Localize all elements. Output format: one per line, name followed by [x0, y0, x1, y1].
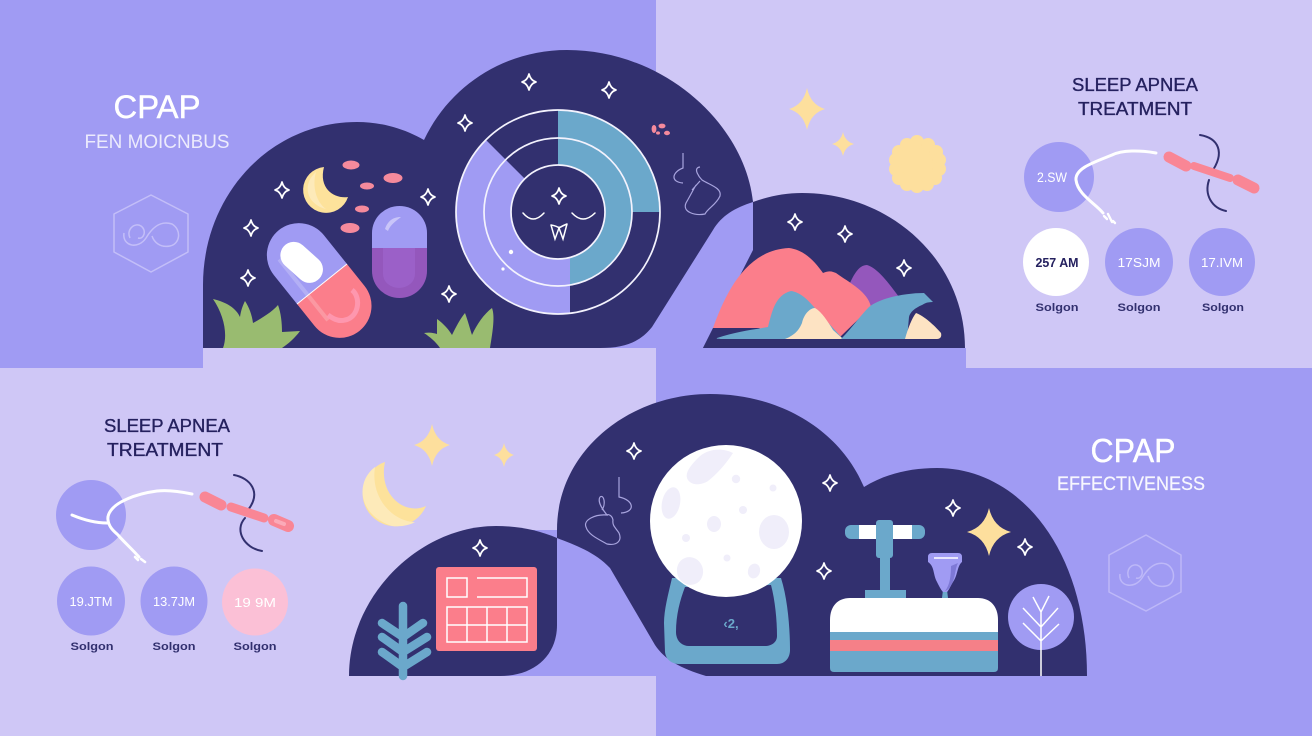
heading: CPAP top left — [84, 89, 230, 153]
stars: bottom right — [627, 443, 1032, 579]
icon: airway doodle — [674, 153, 720, 215]
icon: grass right — [424, 308, 493, 348]
icon: gold stars bottom — [414, 424, 514, 467]
blob: top left — [203, 50, 753, 348]
heading: CPAP effectiveness: CPAP — [1090, 432, 1176, 469]
icon: white tree in circle — [1008, 584, 1074, 676]
stat: 257 AM — [1023, 228, 1089, 314]
stat: 19 9M pink: Solgon — [234, 641, 277, 653]
heading: sleep apnea treatment: SLEEP APNEA — [104, 416, 230, 436]
stars: top left — [241, 74, 616, 302]
stat: 17.IVM — [1189, 228, 1255, 314]
stat: 17SJM: 17SJM — [1118, 255, 1160, 270]
icon: calendar — [436, 567, 537, 651]
icon: teal stand — [664, 578, 790, 664]
stat: 19.JTM — [57, 566, 125, 653]
stat: 13.7JM — [140, 566, 208, 653]
star: bottom left — [473, 540, 487, 556]
icon: airway doodle — [586, 477, 631, 544]
panel: bottom scene right — [557, 394, 1087, 676]
icon: full moon — [650, 445, 802, 597]
heading: sleep apnea treatment — [104, 416, 230, 460]
icon: upright capsule — [372, 206, 427, 298]
stat: 17.IVM: 17.IVM — [1201, 255, 1243, 270]
circle: device — [56, 480, 126, 550]
stat: 257 AM: Solgon — [1036, 302, 1079, 314]
icon: crescent moon cream — [363, 462, 426, 526]
icon: teal stand: ‹2, — [723, 616, 739, 631]
icon: gold stars top — [789, 88, 854, 156]
icon: CPAP machine — [830, 520, 998, 672]
circle: device reading: 2.SW — [1037, 169, 1068, 185]
chart: sleep donut — [456, 110, 660, 314]
icon: crescent moon — [303, 167, 348, 213]
stat: 19.JTM: 19.JTM — [70, 594, 112, 609]
stat: 17.IVM: Solgon — [1202, 302, 1244, 314]
icon: sleeping face — [523, 188, 595, 239]
icon: mountains and waves — [703, 248, 941, 348]
stat: 13.7JM: 13.7JM — [153, 594, 195, 609]
stat: 17SJM: Solgon — [1118, 302, 1161, 314]
heading: CPAP top left: FEN MOICNBUS — [84, 132, 230, 153]
heading: CPAP effectiveness: EFFECTIVENESS — [1057, 474, 1205, 495]
panel: top right landscape — [703, 193, 965, 348]
stat: 19 9M pink: 19 9M — [234, 595, 276, 610]
panel: bottom scene left — [349, 526, 557, 676]
icon: grass left — [213, 299, 300, 348]
stat: 257 AM: 257 AM — [1036, 255, 1078, 270]
heading: sleep apnea treatment: SLEEP APNEA — [1072, 75, 1198, 95]
icon: coral specks — [652, 124, 670, 135]
blob: bottom left — [349, 526, 557, 676]
stars: landscape — [788, 214, 911, 276]
stat: 17SJM — [1105, 228, 1173, 314]
blob: bottom right — [557, 394, 1087, 676]
panel: sleep apnea treatment top right — [1023, 75, 1255, 314]
icon: scalloped sun — [889, 135, 946, 193]
heading: sleep apnea treatment — [1072, 75, 1198, 119]
blob: top right — [703, 193, 965, 348]
heading: CPAP top left: CPAP — [114, 89, 200, 125]
icon: teal tree — [382, 606, 427, 676]
icon: hexagon swirl top left — [114, 195, 188, 272]
heading: sleep apnea treatment: TREATMENT — [1078, 99, 1192, 119]
stat: 19 9M pink — [222, 568, 288, 653]
panel: sleep apnea treatment bottom left — [56, 416, 288, 653]
heading: sleep apnea treatment: TREATMENT — [107, 440, 223, 460]
panel: top left night scene — [203, 50, 753, 351]
icon: tilted capsule — [254, 210, 384, 351]
heading: CPAP effectiveness — [1057, 432, 1205, 495]
stat: 19.JTM: Solgon — [70, 641, 114, 653]
stat: 13.7JM: Solgon — [152, 641, 196, 653]
icon: hexagon swirl bottom right — [1109, 535, 1181, 611]
icon: CPAP tube — [1076, 135, 1254, 223]
icon: gold star — [967, 508, 1011, 556]
icon: CPAP tube — [72, 475, 288, 562]
icon: small pink pills — [340, 160, 402, 233]
circle: device reading — [1024, 142, 1094, 212]
